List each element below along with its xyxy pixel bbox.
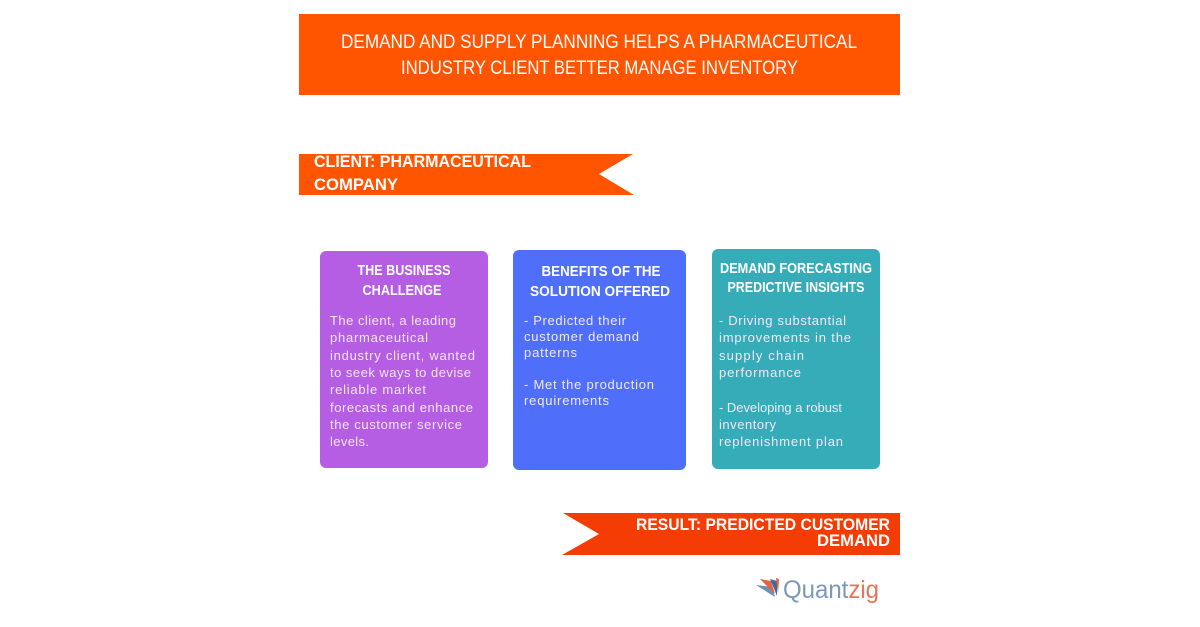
wordmark: Quantzig: [783, 576, 879, 604]
panel: the business challenge: industry client, wanted: [330, 348, 475, 363]
panel: benefits of the solution offered: requirements: [524, 393, 610, 408]
panel: benefits of the solution offered: patterns: [524, 345, 578, 360]
panel: the business challenge: pharmaceutical: [330, 330, 428, 345]
panel: benefits of the solution offered: - Met the production: [524, 377, 654, 392]
panel: the business challenge: the customer service: [330, 417, 462, 432]
client ribbon: COMPANY: [314, 176, 398, 194]
result ribbon: RESULT: PREDICTED CUSTOMER: [636, 516, 890, 534]
panel: benefits of the solution offered: [513, 250, 686, 470]
result ribbon: [562, 513, 900, 555]
panel: the business challenge: levels.: [330, 434, 369, 449]
panel: the business challenge: The client, a leading: [330, 313, 456, 328]
title banner: [299, 14, 900, 95]
logo: Quantzig: [756, 576, 879, 604]
panel: benefits of the solution offered: SOLUTION OFFERED: [530, 284, 670, 300]
panel: the business challenge: forecasts and enhance: [330, 400, 473, 415]
panel: benefits of the solution offered: - Predicted their: [524, 313, 627, 328]
panel: the business challenge: CHALLENGE: [362, 283, 442, 299]
icon: open book fan: [756, 578, 779, 597]
panel: demand forecasting predictive insights: improvements in the: [719, 330, 851, 345]
panel: the business challenge: THE BUSINESS: [358, 263, 451, 279]
panel: demand forecasting predictive insights: - Developing a robust: [719, 400, 842, 415]
panel: demand forecasting predictive insights: replenishment plan: [719, 434, 843, 449]
panel: demand forecasting predictive insights: - Driving substantial: [719, 313, 846, 328]
panel: demand forecasting predictive insights: DEMAND FORECASTING: [720, 261, 872, 277]
result ribbon: DEMAND: [817, 532, 890, 550]
client ribbon: CLIENT: PHARMACEUTICAL: [314, 153, 531, 171]
panel: demand forecasting predictive insights: inventory: [719, 417, 776, 432]
title banner: DEMAND AND SUPPLY PLANNING HELPS A PHARMACEUTICAL: [341, 31, 857, 53]
panel: demand forecasting predictive insights: PREDICTIVE INSIGHTS: [728, 280, 865, 296]
client ribbon: [299, 153, 634, 195]
panel: the business challenge: [320, 251, 488, 468]
panel: the business challenge: reliable market: [330, 382, 426, 397]
panel: demand forecasting predictive insights: supply chain: [719, 348, 804, 363]
panel: demand forecasting predictive insights: performance: [719, 365, 801, 380]
panel: demand forecasting predictive insights: [712, 249, 880, 469]
title banner: INDUSTRY CLIENT BETTER MANAGE INVENTORY: [401, 57, 798, 79]
panel: the business challenge: to seek ways to devise: [330, 365, 471, 380]
panel: benefits of the solution offered: customer demand: [524, 329, 639, 344]
panel: benefits of the solution offered: BENEFITS OF THE: [542, 264, 661, 280]
